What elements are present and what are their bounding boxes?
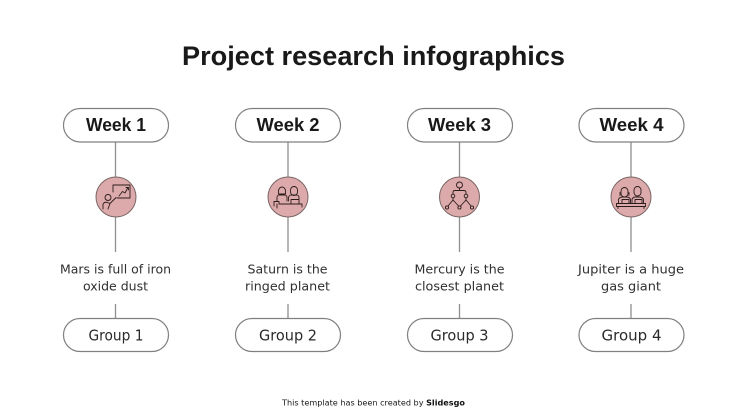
footer credit: This template has been created by Slidesgo: [281, 398, 465, 408]
week pill: week 2: [236, 108, 340, 142]
connector lines: week 4: [630, 142, 632, 318]
description: week 3: Mercury is the: [414, 262, 505, 276]
description: week 2: [245, 262, 330, 294]
icon: two people at a desk: [268, 177, 308, 217]
icon: hierarchy diagram: [440, 177, 480, 217]
description: week 3: closest planet: [415, 278, 504, 294]
description: week 1: oxide dust: [83, 278, 148, 294]
group pill: group 3: [408, 318, 512, 352]
description: week 1: Mars is full of iron: [60, 262, 171, 276]
group pill: group 2: Group 2: [259, 326, 317, 344]
connector lines: week 3: [458, 142, 460, 318]
icon: presenter with chart: [96, 177, 136, 217]
connector lines: week 1: [114, 142, 116, 318]
group pill: group 2: [236, 318, 340, 352]
week pill: week 3: [408, 108, 512, 142]
column: week 2: [236, 108, 340, 352]
description: week 2: Saturn is the: [248, 262, 328, 276]
group pill: group 1: Group 1: [88, 326, 144, 344]
title: Project research infographics: [182, 41, 565, 71]
group pill: group 4: [579, 318, 684, 352]
week pill: week 3: Week 3: [428, 115, 491, 135]
description: week 2: ringed planet: [245, 278, 330, 294]
week pill: week 2: Week 2: [256, 115, 320, 135]
column: week 4: [577, 108, 684, 352]
group pill: group 1: [64, 318, 168, 352]
description: week 4: Jupiter is a huge: [577, 262, 684, 276]
column: week 3: [408, 108, 512, 352]
week pill: week 4: Week 4: [600, 115, 664, 135]
column: week 1: [60, 108, 171, 352]
week pill: week 1: [64, 108, 168, 142]
description: week 3: [414, 262, 505, 294]
description: week 1: [60, 262, 171, 294]
week pill: week 4: [579, 108, 684, 142]
week pill: week 1: Week 1: [86, 115, 146, 135]
description: week 4: [577, 262, 684, 294]
group pill: group 4: Group 4: [602, 326, 662, 344]
description: week 4: gas giant: [601, 278, 661, 294]
icon: two people with laptops at a table: [611, 177, 651, 217]
group pill: group 3: Group 3: [430, 326, 488, 344]
connector lines: week 2: [287, 142, 289, 318]
